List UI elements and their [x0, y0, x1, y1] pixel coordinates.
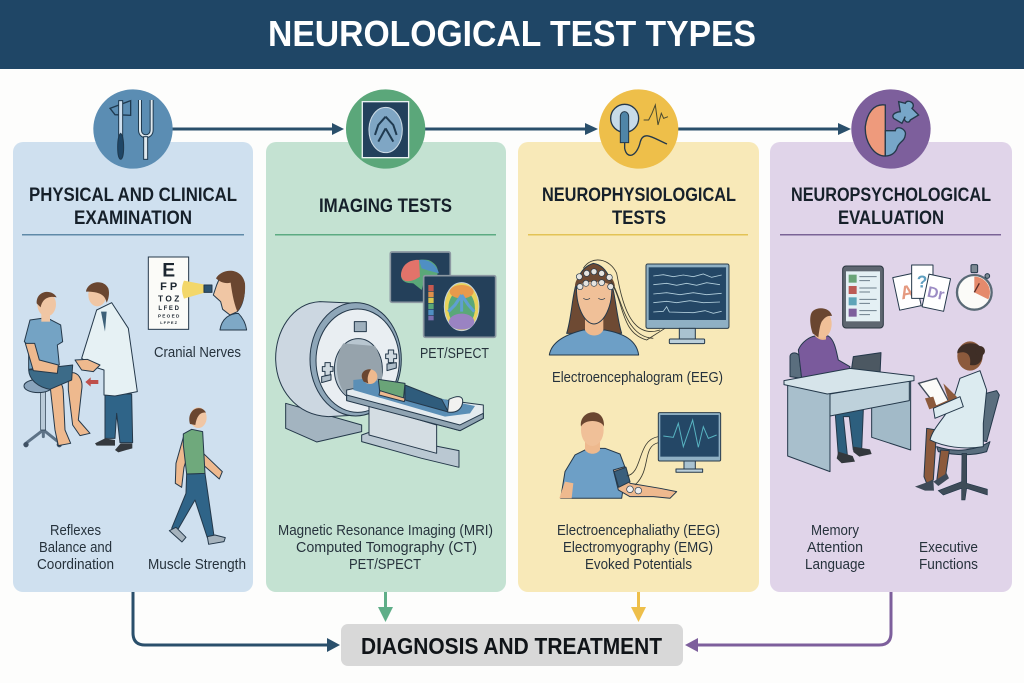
illustration: tablet, cards and stopwatch: ? [917, 271, 927, 291]
illustration: eye chart and penlight: E [162, 261, 175, 282]
icon: brain scan film [346, 89, 425, 169]
labels: imaging modalities: Magnetic Resonance Imaging (MRI) [278, 522, 493, 539]
illustration: patient at desk [784, 308, 914, 472]
icon: electrode and waveform [599, 89, 678, 169]
labels: reflexes balance coordination: Coordination [37, 556, 114, 573]
bottom arrow: neuropsychology to diagnosis [685, 592, 891, 652]
bottom arrow: imaging to diagnosis [378, 592, 393, 622]
illustration: eye chart and penlight: L F P E Z [160, 320, 178, 325]
labels: neurophysiological methods: Electroencephaliathy (EEG) [557, 522, 720, 539]
illustration: cranial nerves label: Cranial Nerves [154, 344, 241, 361]
illustration: eye chart and penlight: L F E D [158, 306, 180, 312]
illustration: EEG cap and monitor [549, 260, 729, 355]
illustration: walking man [169, 407, 225, 544]
label: PET/SPECT beside monitors: PET/SPECT [420, 345, 489, 362]
title: NEUROLOGICAL TEST TYPES [268, 13, 756, 54]
illustration: MRI scanner with patient [276, 302, 483, 467]
labels: reflexes balance coordination: Reflexes [50, 522, 101, 539]
panel: imaging tests [266, 142, 506, 592]
bottom arrow: neurophysiology to diagnosis [631, 592, 646, 622]
illustration: tablet, cards and stopwatch [843, 265, 992, 328]
labels: cognitive domains: Memory [811, 522, 859, 539]
labels: neurophysiological methods: Electromyography (EMG) [563, 539, 713, 556]
heading: neurophysiological tests: TESTS [612, 208, 666, 229]
illustration: PET and SPECT monitors [390, 252, 496, 337]
outcome box: diagnosis and treatment [341, 624, 683, 666]
labels: imaging modalities: PET/SPECT [349, 556, 421, 573]
heading: neuropsychological evaluation: NEUROPSYCHOLOGICAL [791, 185, 991, 206]
illustration: eye chart and penlight: T O Z [158, 294, 179, 304]
labels: imaging modalities: Computed Tomography (CT) [296, 539, 477, 556]
heading: imaging tests: IMAGING TESTS [319, 196, 452, 217]
labels: executive functions: Functions [919, 556, 978, 573]
labels: cognitive domains: Attention [807, 539, 863, 556]
labels: executive functions: Executive [919, 539, 978, 556]
illustration: eye chart and penlight: P E O E D [158, 313, 180, 318]
labels: cognitive domains: Language [805, 556, 865, 573]
panel: neuropsychological evaluation [770, 142, 1012, 592]
illustration: tablet, cards and stopwatch: A [898, 280, 916, 303]
illustration: clinician with clipboard [915, 341, 999, 500]
bottom arrow: physical exam to diagnosis [133, 592, 340, 652]
header banner [0, 0, 1024, 69]
heading: physical and clinical: PHYSICAL AND CLINICAL [29, 185, 237, 206]
heading: physical and clinical: EXAMINATION [74, 208, 192, 229]
labels: neurophysiological methods: Evoked Potentials [585, 556, 692, 573]
panel: physical and clinical examination [13, 142, 253, 592]
labels: reflexes balance coordination: Balance and [39, 539, 112, 556]
icon: reflex hammer and tuning fork [93, 89, 173, 169]
illustration: eye chart and penlight [148, 257, 247, 330]
illustration: tablet, cards and stopwatch: Dr [926, 284, 946, 304]
heading: neurophysiological tests: NEUROPHYSIOLOGICAL [542, 185, 736, 206]
label: muscle strength: Muscle Strength [148, 556, 246, 573]
heading: neuropsychological evaluation: EVALUATION [838, 208, 944, 229]
icon: brain and puzzle [851, 89, 931, 169]
illustration: eye chart and penlight: F P [160, 281, 177, 293]
illustration: EMG arm and monitor [559, 412, 721, 498]
outcome text: DIAGNOSIS AND TREATMENT [361, 633, 662, 659]
panel: neurophysiological tests [518, 142, 759, 592]
label: electroencephalogram: Electroencephalogram (EEG) [552, 369, 723, 386]
illustration: reflex test on seated patient [23, 282, 137, 452]
top flow arrows [172, 123, 851, 135]
